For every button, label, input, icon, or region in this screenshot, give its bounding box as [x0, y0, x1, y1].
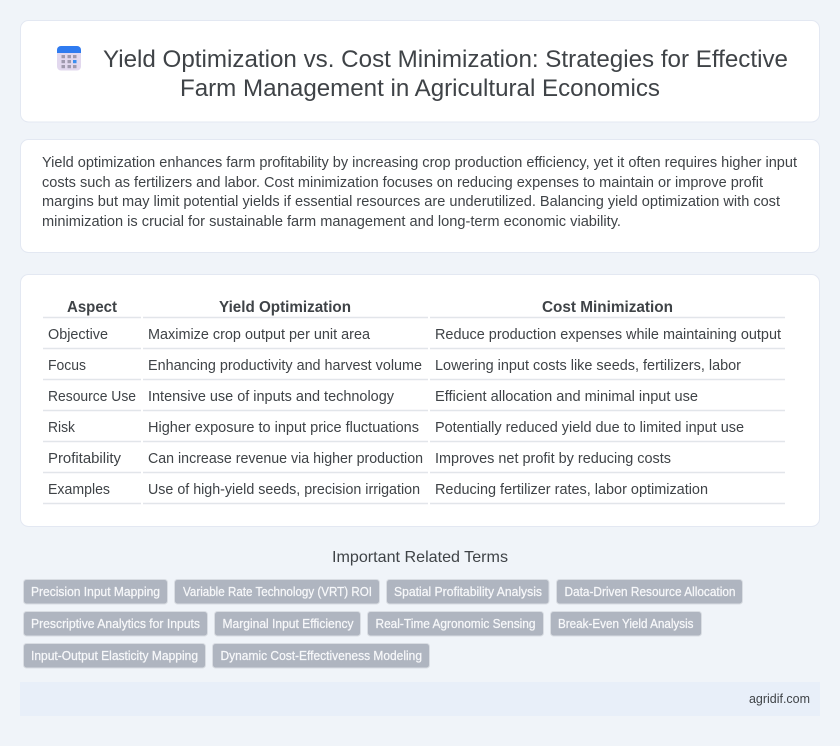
tag: Precision Input Mapping	[31, 585, 160, 599]
text block: summary paragraph	[42, 155, 797, 230]
row: focus: Focus	[48, 358, 86, 374]
row: focus: Enhancing productivity and harvest volume	[148, 358, 422, 374]
row: examples: Use of high-yield seeds, precision irrigation	[148, 482, 420, 498]
footer	[20, 682, 820, 716]
tag: Real-Time Agronomic Sensing	[376, 617, 536, 631]
tag: Marginal Input Efficiency	[222, 617, 354, 631]
tag	[24, 580, 168, 604]
text block: summary paragraph: margins but may limit potential yields if essential resources are underutilized. Balancing yield optimization with cost	[42, 194, 780, 210]
tag: Spatial Profitability Analysis	[394, 585, 542, 599]
table header: Cost Minimization	[542, 299, 673, 316]
panel: header	[20, 20, 820, 122]
tag list	[24, 580, 742, 668]
row: objective	[48, 327, 781, 343]
row: examples	[48, 482, 708, 498]
row: resource use: Intensive use of inputs and technology	[148, 389, 395, 405]
heading: important related terms: Important Related Terms	[332, 549, 508, 566]
panel: summary	[20, 140, 820, 252]
row: profitability	[48, 451, 671, 467]
tag	[214, 612, 360, 636]
tag	[24, 644, 206, 668]
row: resource use: Resource Use	[48, 389, 136, 405]
table header: Aspect	[67, 299, 118, 316]
text block: summary paragraph: Yield optimization enhances farm profitability by increasing crop production efficiency, yet it often requires higher input	[42, 155, 797, 171]
row: profitability: Can increase revenue via higher production	[148, 451, 423, 467]
tag	[24, 612, 208, 636]
tag	[550, 612, 702, 636]
icon: calendar	[57, 46, 81, 70]
title	[103, 46, 788, 102]
tag: Break-Even Yield Analysis	[558, 617, 694, 631]
tag	[212, 644, 430, 668]
table header	[67, 299, 673, 316]
row: objective: Reduce production expenses while maintaining output	[435, 327, 781, 343]
row: risk: Risk	[48, 420, 76, 436]
tag: Input-Output Elasticity Mapping	[31, 649, 198, 663]
row: objective: Objective	[48, 327, 108, 343]
row: objective: Maximize crop output per unit area	[148, 327, 370, 343]
row: examples: Examples	[48, 482, 110, 498]
text block: summary paragraph: minimization is crucial for sustainable farm management and long-term economic viability.	[42, 214, 621, 230]
tag	[556, 580, 742, 604]
row: resource use: Efficient allocation and minimal input use	[435, 389, 698, 405]
title: Farm Management in Agricultural Economics	[180, 75, 660, 102]
row: focus	[48, 358, 741, 374]
panel: comparison table	[20, 274, 820, 526]
table header: Yield Optimization	[219, 299, 351, 316]
tag	[386, 580, 549, 604]
tag: Data-Driven Resource Allocation	[564, 585, 736, 599]
tag	[368, 612, 544, 636]
row: profitability: Improves net profit by reducing costs	[435, 451, 671, 467]
row: focus: Lowering input costs like seeds, fertilizers, labor	[435, 358, 741, 374]
footer: agridif.com	[749, 691, 810, 706]
row: resource use	[48, 389, 698, 405]
row: risk	[48, 420, 744, 436]
tag: Dynamic Cost-Effectiveness Modeling	[220, 649, 422, 663]
tag: Prescriptive Analytics for Inputs	[31, 617, 200, 631]
tag: Variable Rate Technology (VRT) ROI	[183, 585, 372, 599]
row: profitability: Profitability	[48, 451, 122, 467]
text block: summary paragraph: costs such as fertilizers and labor. Cost minimization focuses on reducing expenses to maintain or improve profit	[42, 175, 763, 191]
tag	[174, 580, 380, 604]
title: Yield Optimization vs. Cost Minimization: Strategies for Effective	[103, 46, 788, 73]
row: examples: Reducing fertilizer rates, labor optimization	[435, 482, 708, 498]
row: risk: Potentially reduced yield due to limited input use	[435, 420, 744, 436]
row: risk: Higher exposure to input price fluctuations	[148, 420, 419, 436]
